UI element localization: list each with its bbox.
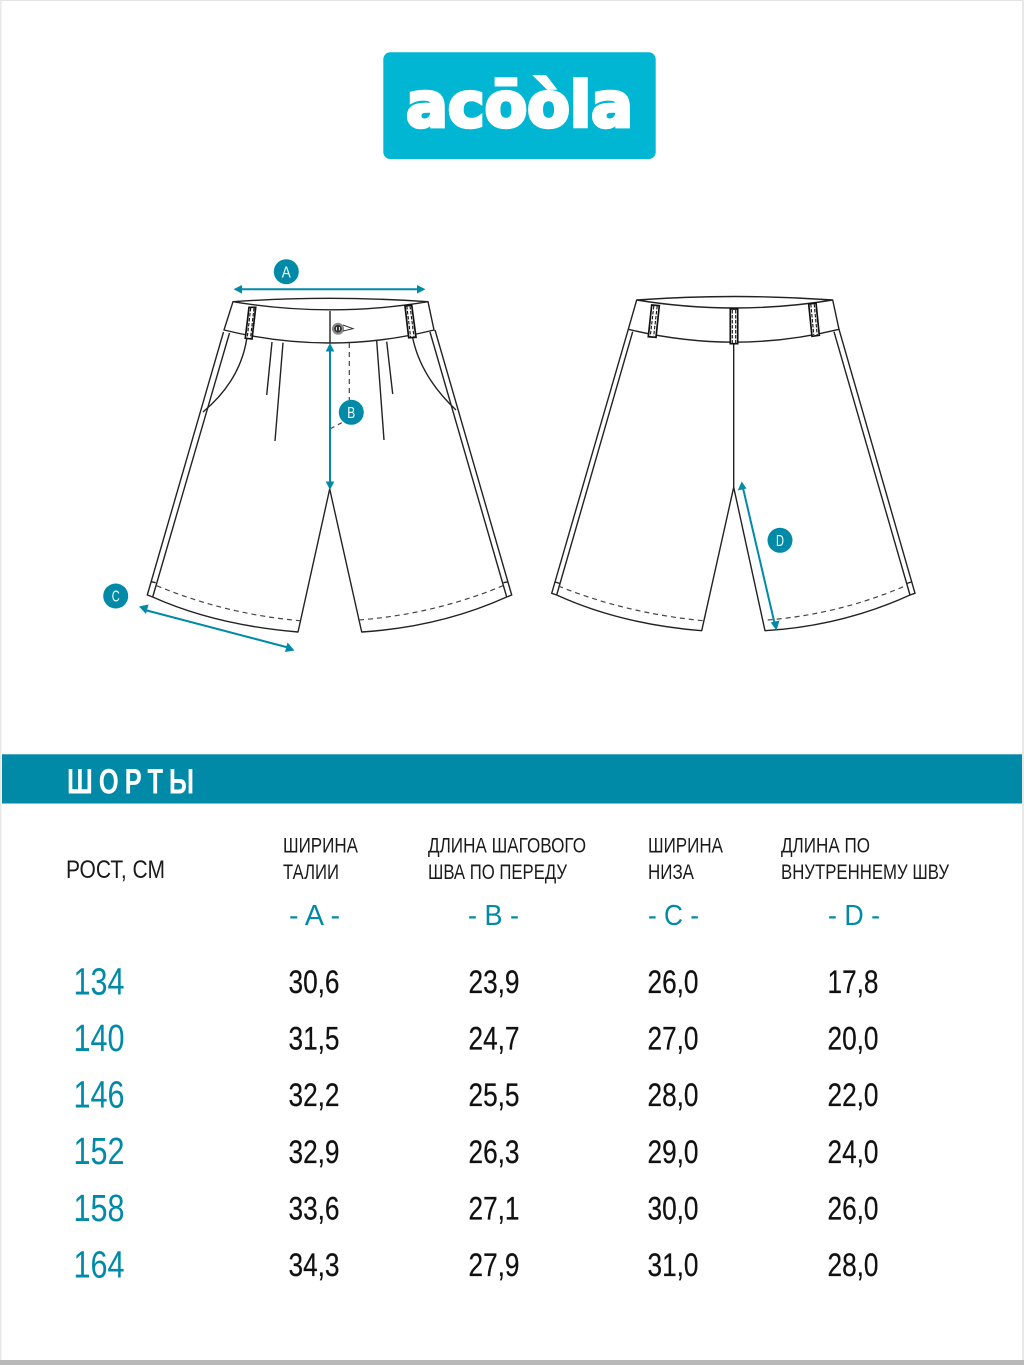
table header: height: РОСТ, СМ <box>66 856 165 884</box>
table row 158: 27,1 <box>468 1190 520 1226</box>
brand logo <box>383 52 656 159</box>
table header: front inseam B: ДЛИНА ШАГОВОГО <box>428 834 586 857</box>
table row 146: 28,0 <box>648 1077 698 1113</box>
table header: front inseam B: ШВА ПО ПЕРЕДУ <box>428 861 568 884</box>
table row 146: 22,0 <box>828 1077 878 1113</box>
table row 158: 26,0 <box>828 1190 878 1226</box>
table row 152: 32,9 <box>288 1134 340 1170</box>
table header: hem width C: НИЗА <box>648 861 694 884</box>
waistband <box>628 296 839 342</box>
table row 134: 134 <box>74 962 124 1004</box>
table row 164: 164 <box>74 1244 124 1286</box>
table row 152: 152 <box>74 1131 124 1173</box>
table row 158: 30,0 <box>648 1190 698 1226</box>
table header: waist width A <box>283 834 358 932</box>
title banner <box>2 754 1022 804</box>
table row 164: 27,9 <box>468 1247 520 1283</box>
table header: hem width C: - C - <box>648 900 699 932</box>
table row 140 <box>74 1018 878 1060</box>
table header: inner seam D <box>781 834 950 932</box>
table row 134: 23,9 <box>468 964 520 1000</box>
measure D: inner seam length: D <box>776 533 784 550</box>
table header: waist width A: ШИРИНА <box>283 834 358 857</box>
table header: waist width A: ТАЛИИ <box>283 861 339 884</box>
table row 134: 30,6 <box>288 964 340 1000</box>
brand logo: acōòla <box>406 68 633 142</box>
table row 146: 32,2 <box>288 1077 340 1113</box>
hem stitching <box>558 586 905 621</box>
measure B: front inseam length: B <box>347 405 355 422</box>
measure C: hem width <box>103 584 294 652</box>
belt loops <box>245 305 416 339</box>
table header: inner seam D: - D - <box>828 900 880 932</box>
table row 164: 34,3 <box>288 1247 340 1283</box>
table row 152: 26,3 <box>468 1134 520 1170</box>
pleats <box>267 341 393 441</box>
dashed fly and leader lines <box>330 343 349 429</box>
measure D: inner seam length <box>738 482 792 630</box>
measure B: front inseam length <box>326 343 364 490</box>
pockets <box>203 338 456 412</box>
front view of shorts <box>147 298 512 632</box>
back view of shorts <box>552 296 915 631</box>
table header: front inseam B: - B - <box>468 900 519 932</box>
table row 134: 17,8 <box>828 964 878 1000</box>
table row 152 <box>74 1131 878 1173</box>
table header: inner seam D: ВНУТРЕННЕМУ ШВУ <box>781 861 950 884</box>
measure C: hem width: C <box>112 589 120 606</box>
table row 158: 33,6 <box>288 1190 340 1226</box>
table row 152: 29,0 <box>648 1134 698 1170</box>
table row 140: 20,0 <box>828 1021 878 1057</box>
table row 158 <box>74 1188 878 1230</box>
belt loops <box>648 303 819 344</box>
table row 140: 24,7 <box>468 1021 520 1057</box>
title banner: ШОРТЫ <box>67 762 200 801</box>
table row 134: 26,0 <box>648 964 698 1000</box>
table row 146: 25,5 <box>468 1077 520 1113</box>
table header: inner seam D: ДЛИНА ПО <box>781 834 870 857</box>
waistband <box>224 298 434 343</box>
table header: hem width C <box>648 834 723 932</box>
table row 158: 158 <box>74 1188 124 1230</box>
table row 164 <box>74 1244 878 1286</box>
button and buttonhole <box>332 323 353 335</box>
table row 164: 28,0 <box>828 1247 878 1283</box>
hem stitching <box>157 586 503 621</box>
shorts body outline <box>552 329 915 631</box>
table row 146: 146 <box>74 1075 124 1117</box>
table row 140: 31,5 <box>288 1021 340 1057</box>
table row 140: 27,0 <box>648 1021 698 1057</box>
table header: hem width C: ШИРИНА <box>648 834 723 857</box>
table row 140: 140 <box>74 1018 124 1060</box>
shorts body outline <box>147 330 512 632</box>
table header: front inseam B <box>428 834 586 932</box>
table row 146 <box>74 1075 878 1117</box>
measure A: waist width <box>234 259 426 294</box>
table header: waist width A: - A - <box>289 900 340 932</box>
measure A: waist width: A <box>282 264 291 282</box>
table row 152: 24,0 <box>828 1134 878 1170</box>
table row 164: 31,0 <box>648 1247 698 1283</box>
table row 134 <box>74 962 878 1004</box>
